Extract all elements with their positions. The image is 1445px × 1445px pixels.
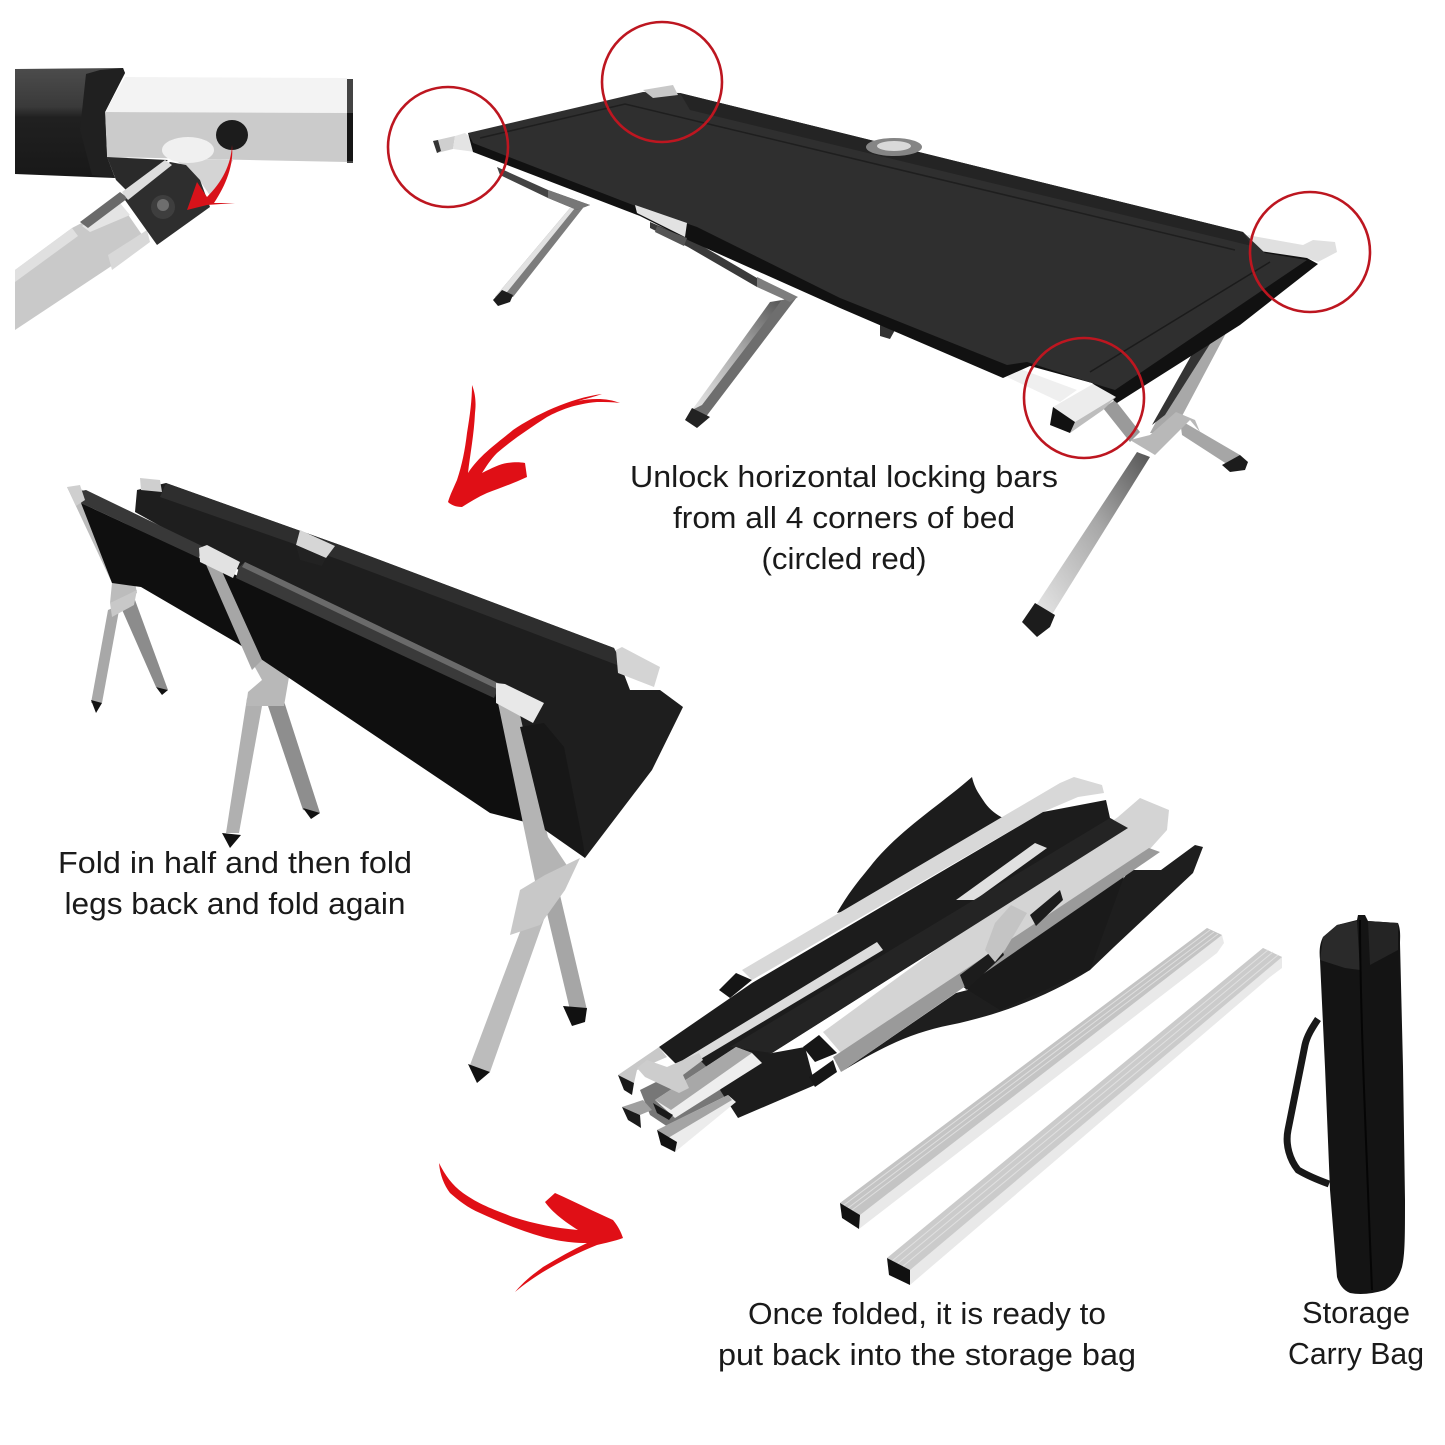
text: once folded <box>718 1296 1136 1372</box>
text: storage bag label: Storage <box>1302 1295 1410 1330</box>
folded cot <box>618 777 1203 1152</box>
far legs <box>91 605 120 703</box>
text: fold instruction: legs back and fold again <box>64 886 406 921</box>
cot: open camp bed <box>433 85 1337 637</box>
storage carry bag <box>1287 915 1405 1294</box>
pivot plate <box>125 162 210 245</box>
joints <box>67 485 85 506</box>
bar one <box>840 928 1224 1229</box>
front legs <box>498 703 570 908</box>
black underside of fabric <box>468 133 1318 403</box>
red arrow: to folded step <box>439 1163 623 1292</box>
bar two <box>887 948 1282 1285</box>
small far leg stub <box>880 325 895 339</box>
fabric top <box>468 92 1307 390</box>
text: storage bag label <box>1288 1295 1424 1371</box>
text: unlock instruction: Unlock horizontal locking bars <box>630 459 1058 494</box>
back panel <box>135 483 683 858</box>
right silver bars <box>823 798 1169 1053</box>
tube <box>105 77 347 113</box>
cot: half-folded <box>67 478 683 1083</box>
back legs <box>495 208 583 297</box>
text: unlock instruction: from all 4 corners of bed <box>673 500 1015 535</box>
text: unlock instruction: (circled red) <box>762 541 926 576</box>
main padded sleeve <box>730 818 1128 1053</box>
lower fabric <box>841 845 1203 1072</box>
front X legs <box>1103 400 1140 442</box>
top locks and hardware <box>643 85 678 98</box>
middle legs <box>226 695 264 833</box>
hinge bracket <box>960 945 1004 990</box>
lower strut <box>15 203 147 330</box>
front tube ends <box>618 1047 667 1083</box>
dark bundle fill <box>659 800 1128 1075</box>
front rail <box>81 490 202 558</box>
sleeve <box>15 68 125 178</box>
bag strap <box>1287 1019 1329 1184</box>
end caps <box>803 1035 837 1062</box>
underside bands and clamps <box>497 167 590 210</box>
upper fabric wing <box>837 777 1003 913</box>
inset: locking bar detail <box>15 68 353 330</box>
front square tube <box>1053 384 1116 422</box>
text: storage bag label: Carry Bag <box>1288 1336 1424 1371</box>
text: unlock instruction <box>630 459 1058 576</box>
middle leg strut over panel <box>204 560 262 670</box>
text: once folded: Once folded, it is ready to <box>748 1296 1106 1331</box>
corner tubes <box>433 136 455 153</box>
red circles marking the four corners <box>388 22 1370 458</box>
text: once folded: put back into the storage bag <box>718 1337 1136 1372</box>
text: fold instruction: Fold in half and then fold <box>58 845 412 880</box>
end pocket <box>520 723 585 858</box>
text: fold instruction <box>58 845 412 921</box>
red arrow: to fold step <box>448 385 620 507</box>
silver mid strips <box>683 942 883 1060</box>
front panel <box>81 503 525 822</box>
icon: small red arrow <box>187 145 235 210</box>
loose locking bars <box>840 928 1282 1285</box>
upper silver bar <box>742 777 1104 980</box>
